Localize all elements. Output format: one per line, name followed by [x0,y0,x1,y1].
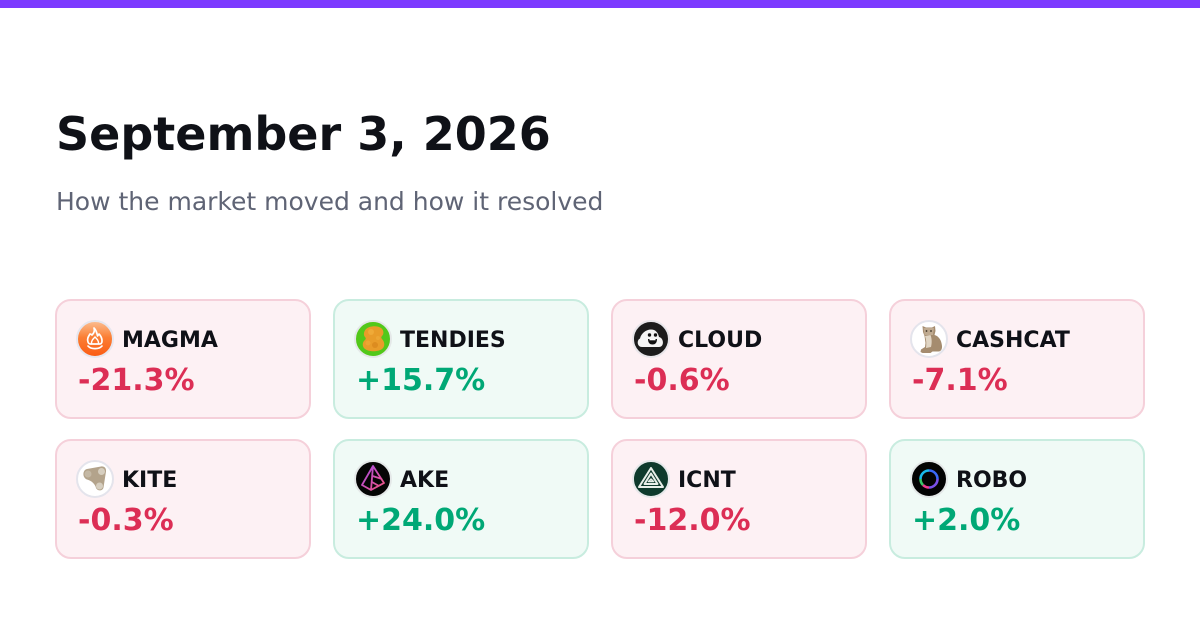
icon: kite shape [76,460,114,498]
card: CLOUD [611,299,867,419]
icon: magma flame [76,320,114,358]
top accent bar [0,0,1200,8]
change: -12.0% [634,503,751,538]
ticker: MAGMA [122,328,218,353]
icon: cat [910,320,948,358]
ticker: CLOUD [678,328,762,353]
card: CASHCAT [889,299,1145,419]
change: +2.0% [912,503,1020,538]
ticker: CASHCAT [956,328,1070,353]
change: +24.0% [356,503,485,538]
change: -0.3% [78,503,174,538]
change: -7.1% [912,363,1008,398]
icon: smiling cloud [632,320,670,358]
change: +15.7% [356,363,485,398]
card: AKE [333,439,589,559]
card: ROBO [889,439,1145,559]
card: MAGMA [55,299,311,419]
ticker: ROBO [956,468,1027,493]
card: ICNT [611,439,867,559]
icon: chicken nugget [354,320,392,358]
change: -0.6% [634,363,730,398]
subtitle: How the market moved and how it resolved [56,187,603,216]
ticker: ICNT [678,468,736,493]
icon: pyramid [354,460,392,498]
change: -21.3% [78,363,195,398]
title: September 3, 2026 [56,107,551,161]
card: TENDIES [333,299,589,419]
icon: rainbow ring [910,460,948,498]
ticker: TENDIES [400,328,506,353]
ticker: AKE [400,468,449,493]
ticker: KITE [122,468,177,493]
icon: nested triangles [632,460,670,498]
card: KITE [55,439,311,559]
